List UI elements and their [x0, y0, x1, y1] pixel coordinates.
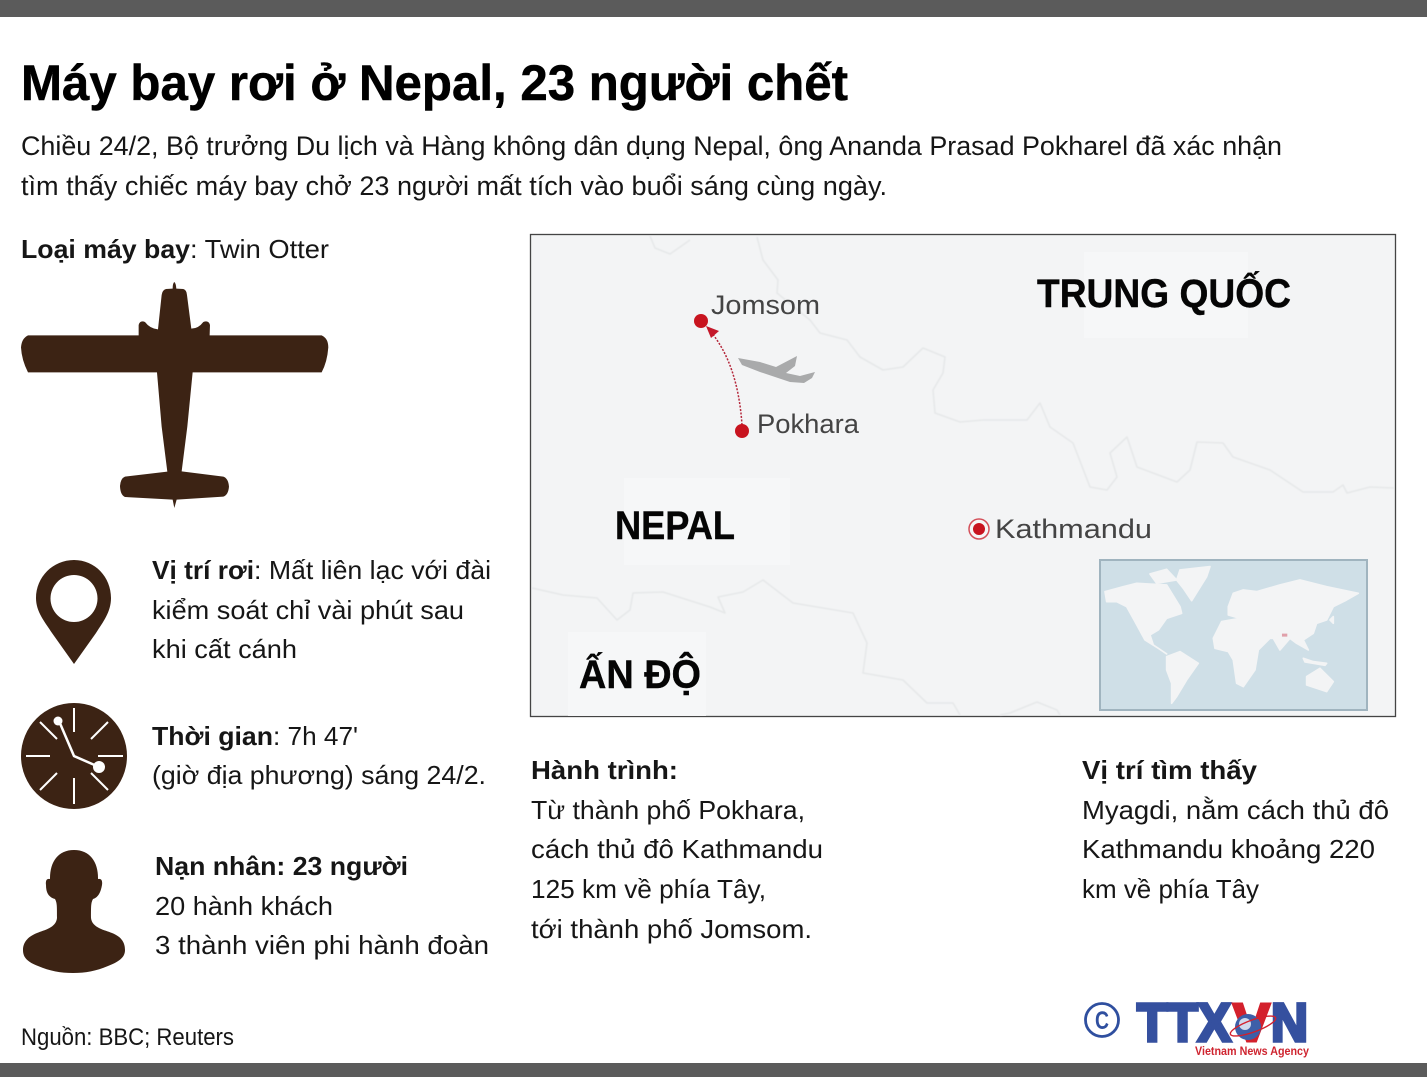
marker: Kathmandu	[969, 519, 989, 539]
copyright mark: C	[1095, 1007, 1109, 1035]
victims text: Nạn nhân: 23 người	[155, 851, 408, 881]
marker: Jomsom	[694, 314, 708, 328]
label: Nepal: NEPAL	[615, 504, 735, 548]
icon: person	[23, 850, 125, 973]
time text: Thời gian	[152, 721, 273, 751]
crash location text: Vị trí rơi	[152, 555, 254, 585]
icon: location pin	[36, 560, 111, 664]
journey text: Hành trình:	[531, 755, 678, 785]
inset world map	[1100, 560, 1367, 710]
wordmark: TTX	[1137, 993, 1231, 1053]
label backgrounds	[568, 252, 1248, 716]
top bar	[0, 0, 1427, 17]
source: Nguồn: BBC; Reuters	[21, 1024, 234, 1051]
crash location text: kiểm soát chỉ vài phút sau	[152, 595, 464, 625]
label: Trung Quốc: TRUNG QUỐC	[1037, 270, 1291, 316]
icon: clock	[21, 703, 127, 809]
title: Máy bay rơi ở Nepal, 23 người chết	[21, 55, 848, 111]
found location text: km về phía Tây	[1082, 874, 1259, 904]
found location text: Vị trí tìm thấy	[1082, 755, 1258, 785]
victims text: 20 hành khách	[155, 891, 333, 921]
logo	[1086, 993, 1309, 1058]
flight route	[706, 326, 742, 425]
crash location text: : Mất liên lạc với đài	[254, 555, 491, 585]
marker: Pokhara	[735, 424, 749, 438]
copyright mark	[1086, 1004, 1118, 1036]
label: Ấn Độ: ẤN ĐỘ	[579, 651, 701, 697]
found location text: Myagdi, nằm cách thủ đô	[1082, 795, 1389, 825]
label: Kathmandu: Kathmandu	[995, 514, 1152, 544]
wordmark: N	[1271, 993, 1308, 1053]
aircraft type: Loại máy bay	[21, 234, 191, 264]
globe	[1228, 1012, 1278, 1040]
victims text: 3 thành viên phi hành đoàn	[155, 930, 489, 960]
bottom bar	[0, 1063, 1427, 1077]
map borders	[532, 236, 1394, 715]
journey text: 125 km về phía Tây,	[531, 874, 766, 904]
found location text: Kathmandu khoảng 220	[1082, 834, 1375, 864]
time text	[152, 721, 486, 790]
icon: aircraft	[21, 282, 328, 508]
crash location text: khi cất cánh	[152, 634, 297, 664]
wordmark: V	[1233, 993, 1270, 1053]
journey text	[531, 755, 823, 944]
intro text: Chiều 24/2, Bộ trưởng Du lịch và Hàng không dân dụng Nepal, ông Ananda Prasad Pokharel đã xác nhận	[21, 131, 1282, 161]
journey text: cách thủ đô Kathmandu	[531, 834, 823, 864]
time text: (giờ địa phương) sáng 24/2.	[152, 760, 486, 790]
journey text: Từ thành phố Pokhara,	[531, 795, 805, 825]
victims text	[155, 851, 489, 960]
aircraft type	[21, 234, 329, 264]
crash location text	[152, 555, 491, 664]
intro text	[21, 131, 1282, 201]
icon: plane	[738, 356, 815, 383]
label: Pokhara: Pokhara	[757, 409, 860, 439]
time text: : 7h 47'	[273, 721, 358, 751]
found location text	[1082, 755, 1389, 904]
tagline: Vietnam News Agency	[1195, 1044, 1309, 1058]
panel: map	[530, 234, 1396, 716]
aircraft type: : Twin Otter	[190, 234, 329, 264]
wordmark	[1137, 993, 1308, 1053]
label: Jomsom: Jomsom	[711, 290, 820, 320]
journey text: tới thành phố Jomsom.	[531, 914, 812, 944]
intro text: tìm thấy chiếc máy bay chở 23 người mất tích vào buổi sáng cùng ngày.	[21, 171, 887, 201]
